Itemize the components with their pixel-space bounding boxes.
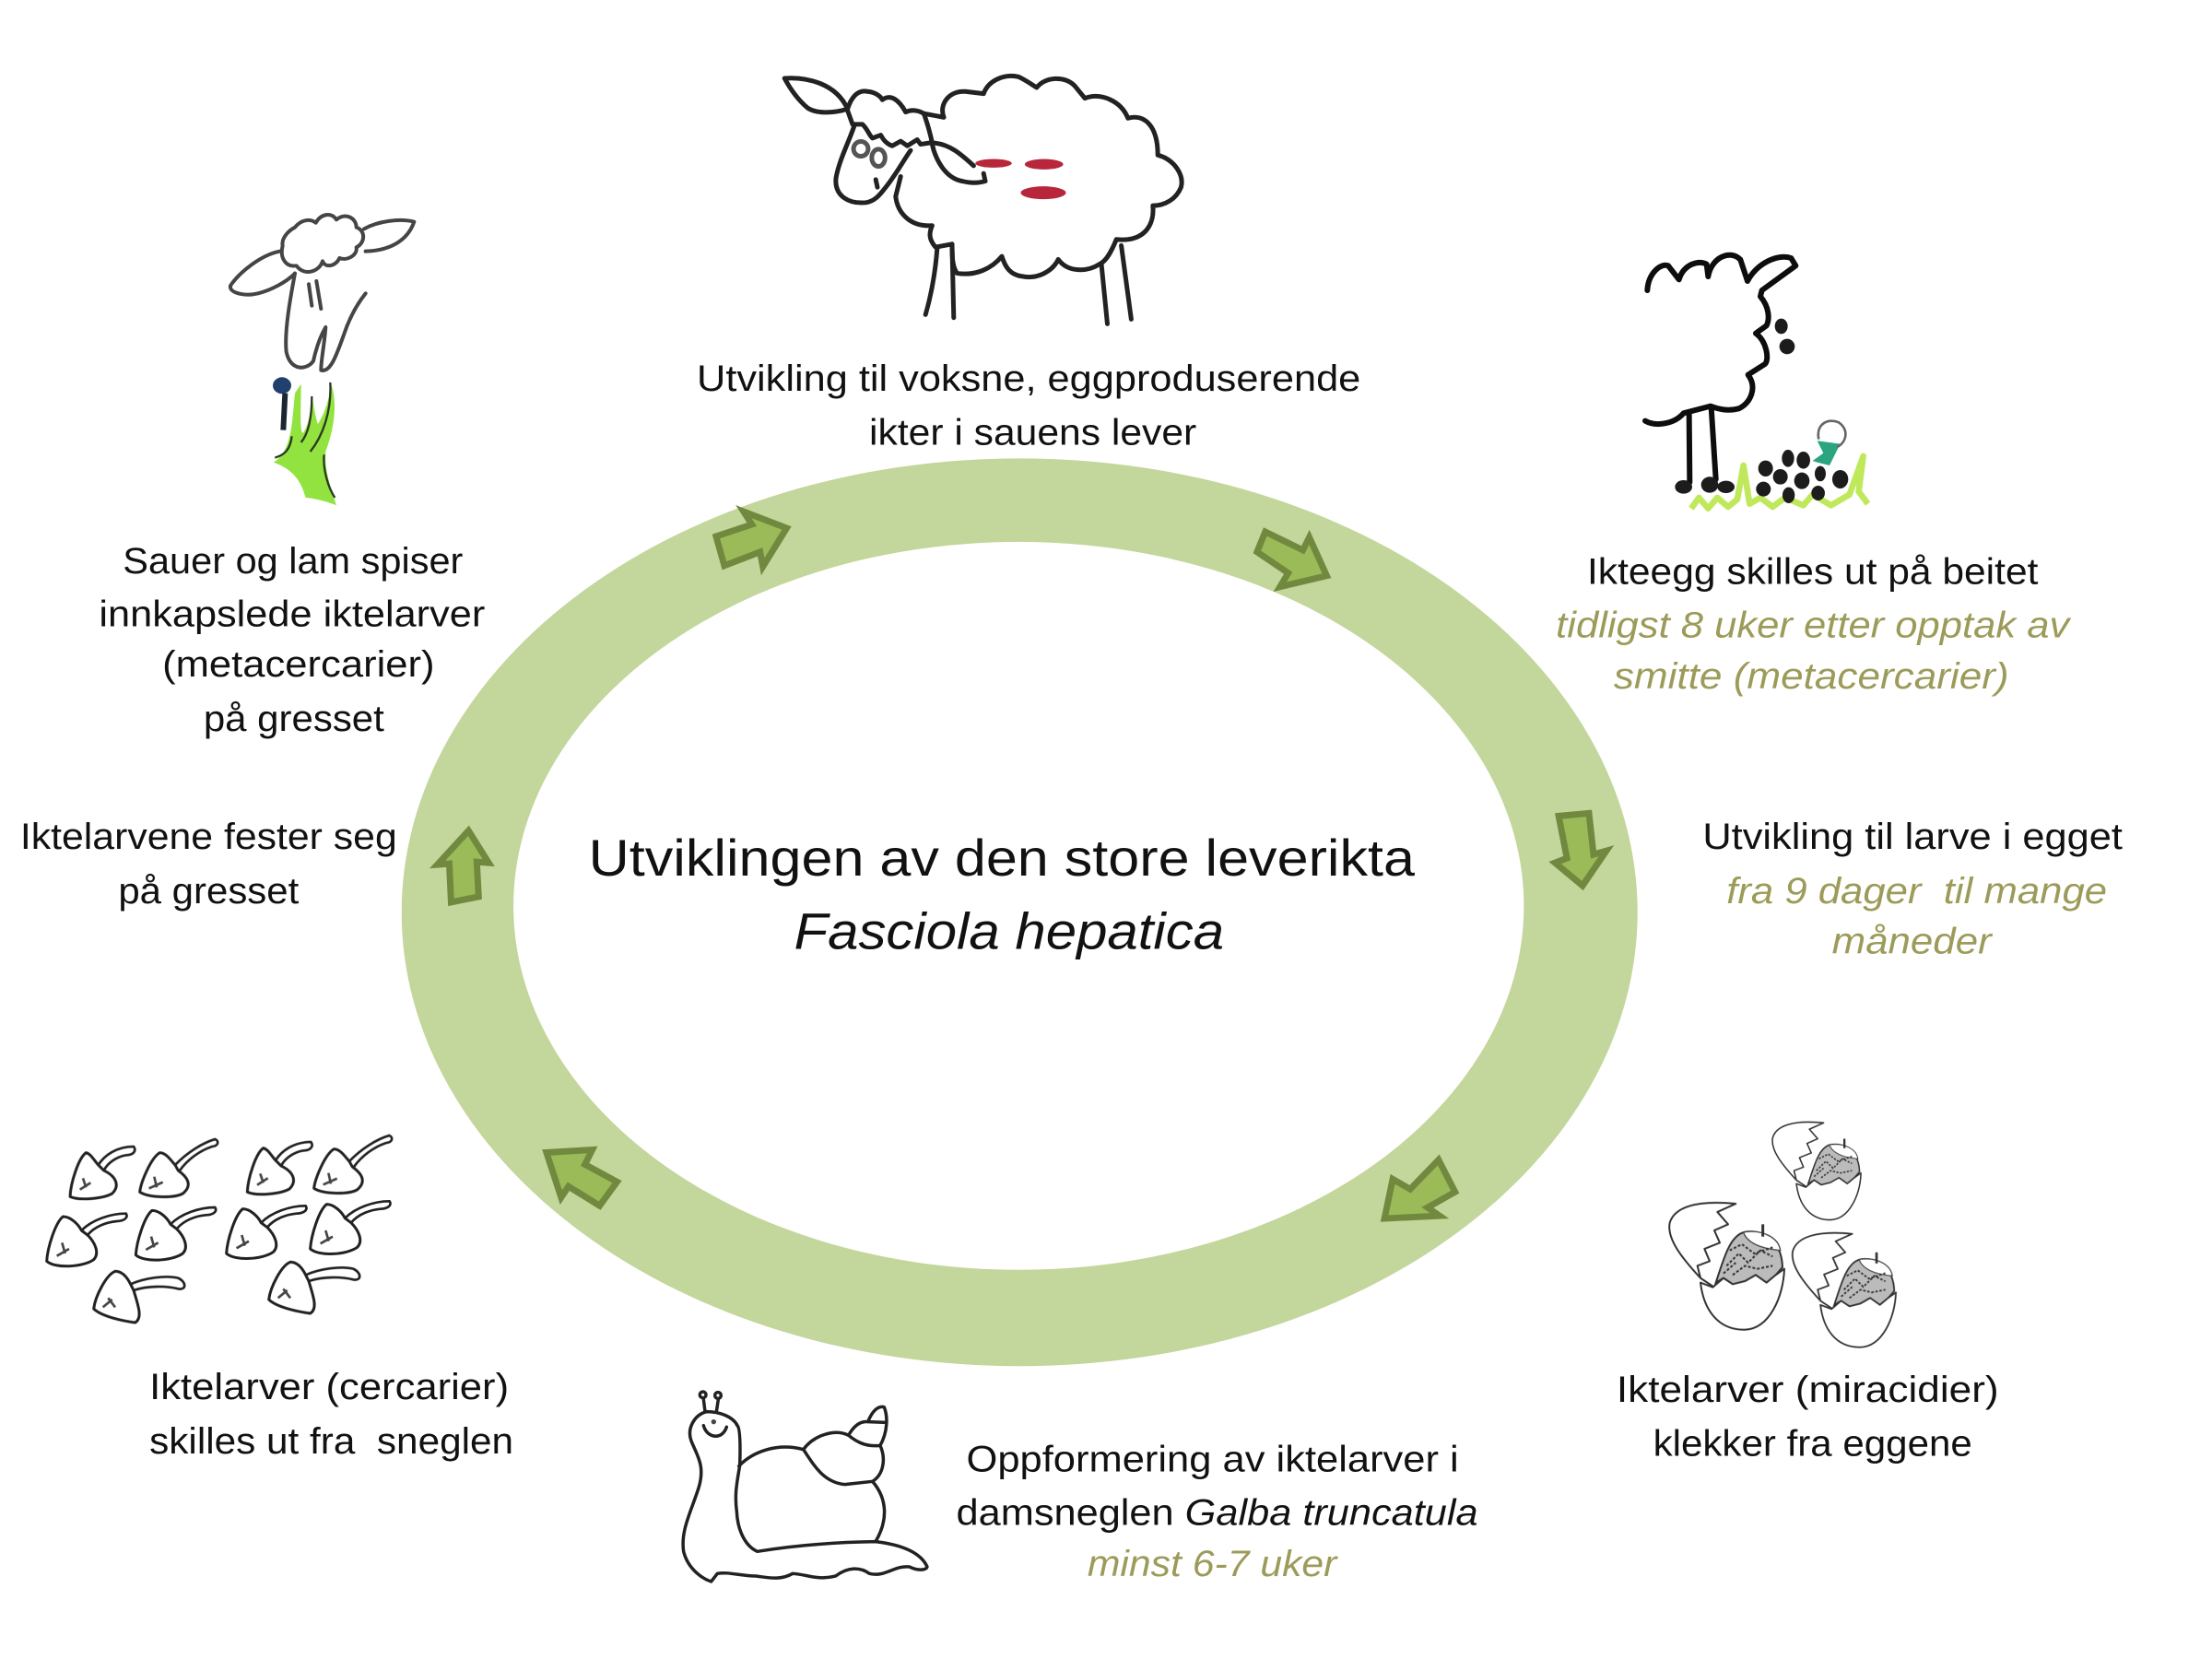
text: larva develops in egg: Utvikling til larve i egget: [1702, 817, 2123, 857]
arrow: left: [438, 830, 488, 902]
arrow: right: [1555, 813, 1606, 886]
text: miracidia hatch: Iktelarver (miracidier): [1617, 1370, 1999, 1410]
text: larva develops in egg: måneder: [1832, 922, 1994, 962]
central title: Utviklingen av den store leverikta: [589, 830, 1415, 887]
text: larvae attach to grass: på gresset: [118, 871, 299, 912]
text: sheep eat metacercariae: på gresset: [204, 699, 384, 739]
icon: grazing sheep with grass: [230, 215, 414, 505]
text: multiplication in snail: [957, 1440, 1478, 1584]
central title: Fasciola hepatica: [794, 903, 1224, 960]
text: larvae attach to grass: Iktelarvene fester seg: [20, 817, 397, 857]
arrow: bottom right: [1384, 1159, 1455, 1218]
arrows around the ring: [438, 512, 1606, 1218]
text: eggs shed on pasture: tidligst 8 uker etter opptak av: [1556, 605, 2072, 645]
icon: hatching eggs: [1669, 1122, 1896, 1347]
text: miracidia hatch: klekker fra eggene: [1653, 1424, 1972, 1465]
text: multiplication in snail: minst 6-7 uker: [1088, 1544, 1338, 1584]
text: larvae attach to grass: [20, 817, 397, 912]
text: cercariae shed from snail: Iktelarver (cercarier): [149, 1367, 509, 1407]
text: cercariae shed from snail: skilles ut fra sneglen: [149, 1421, 513, 1462]
arrow: bottom left: [547, 1149, 618, 1206]
text: eggs shed on pasture: smitte (metacercarier): [1614, 656, 2009, 697]
icon: adult sheep with liver flukes: [784, 76, 1182, 324]
text: sheep eat metacercariae: Sauer og lam spiser: [123, 541, 463, 582]
text: multiplication in snail: Oppformering av iktelarver i: [967, 1440, 1459, 1480]
life cycle ring: [402, 458, 1638, 1366]
text: cercariae shed from snail: [149, 1367, 513, 1462]
text: sheep eat metacercariae: [99, 541, 485, 739]
text: eggs shed on pasture: Ikteegg skilles ut på beitet: [1587, 552, 2038, 593]
central title: [589, 830, 1415, 960]
text: larva develops in egg: fra 9 dager til mange: [1726, 871, 2107, 912]
text: sheep eat metacercariae: innkapslede iktelarver: [99, 594, 485, 634]
icon: snail: [683, 1392, 927, 1582]
text: sheep eat metacercariae: (metacercarier): [162, 644, 435, 685]
text: adult flukes in liver: [697, 359, 1360, 453]
arrow: top left: [716, 512, 787, 567]
arrow: top right: [1257, 532, 1326, 587]
icon: sheep dropping eggs on pasture: [1645, 255, 1868, 509]
text: adult flukes in liver: Utvikling til voksne, eggproduserende: [697, 359, 1360, 399]
icon: cercariae group: [47, 1135, 392, 1323]
text: multiplication in snail: damsneglen Galba truncatula: [957, 1492, 1478, 1533]
text: eggs shed on pasture: [1556, 552, 2072, 697]
text: miracidia hatch: [1617, 1370, 1999, 1465]
text: larva develops in egg: [1702, 817, 2123, 962]
text: adult flukes in liver: ikter i sauens lever: [869, 412, 1196, 453]
